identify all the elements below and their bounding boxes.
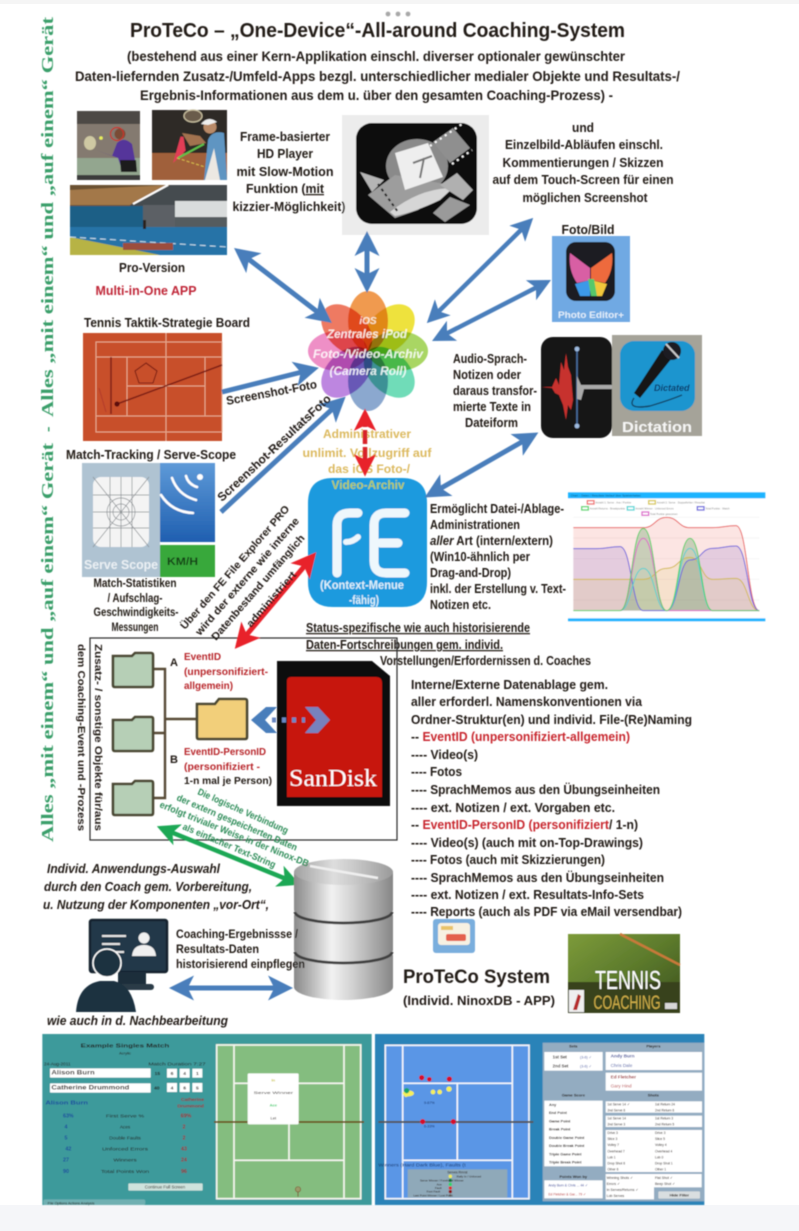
text: status history: Daten-Fortschreibungen gem. individ. (306, 638, 503, 652)
filter panel: 2nd Set (553, 1063, 569, 1068)
text: ProTeCo System: ProTeCo System (403, 967, 550, 988)
text: match statistics: / Aufschlag- (108, 593, 163, 605)
label A: A (170, 657, 178, 669)
icon: database (294, 859, 393, 1000)
arrow: FE to storage (red) (238, 556, 313, 645)
filter panel: Andy Burn (611, 1054, 635, 1059)
filter panel: Double Break Point (549, 1144, 585, 1148)
icon: photo archive flower (308, 291, 428, 411)
icon: dictation (612, 335, 702, 436)
area line chart: Chart – Daten / Resultats-Verlauf über Spieleinheiten (571, 494, 641, 498)
screenshot: match score app: 40 (154, 1085, 160, 1091)
icon: small app (433, 919, 475, 953)
subtitle (75, 49, 680, 103)
area line chart: Total Punkte · Match (705, 507, 730, 511)
filter panel: Lob Serves (607, 1194, 625, 1198)
screenshot: match score app: 4 (171, 1085, 174, 1091)
icon: FE file explorer: -fähig) (349, 595, 379, 607)
text: file administration: Administrationen (430, 518, 520, 532)
screenshot: match score app: 69% (181, 1114, 192, 1120)
filter panel: Lob 0 (655, 1155, 663, 1159)
icon: serve scope (82, 463, 215, 577)
text: data storage list: ---- ext. Notizen / ext. Vorgaben etc. (411, 801, 615, 815)
text: single frame commentary: und (572, 121, 594, 135)
area line chart: Anzahl 1. Serve · Ass / Punkte (595, 501, 632, 505)
tactic board (83, 333, 222, 441)
text: audio notes: Audio-Sprach- (453, 352, 527, 366)
screenshot: match score app: 2 (183, 1125, 186, 1131)
filter panel (543, 1043, 704, 1201)
screenshot: match score app: Serve Winner (254, 1090, 294, 1095)
text: single frame commentary: Einzelbild-Abläufen einschl. (505, 138, 663, 152)
filter panel: 1st Return 3 (655, 1117, 673, 1121)
text: coaching results: Coaching-Ergebnissse / (176, 929, 299, 941)
vertical folder caption: Zusatz- / sonstige Objekte für/aus (92, 644, 104, 831)
image: tennis coaching book: TENNIS (595, 965, 661, 995)
area line chart: Anzahl Returns · Breakpunkte (590, 507, 626, 511)
text: file administration: inkl. der Erstellung v. Text- (430, 582, 566, 596)
area line chart: Anzahl Winner · Unforced Errors (635, 507, 674, 511)
vertical slogan (38, 16, 57, 842)
text: frame based HD player: Frame-basierter (240, 130, 330, 144)
filter panel: Overhead 7 (607, 1149, 625, 1153)
text: administrative access (302, 427, 433, 492)
text: individual selection: u. Nutzung der Komponenten „vor-Ort“, (43, 898, 269, 912)
rotated text: file explorer: Datenbestand umfänglich (209, 532, 307, 643)
text: audio notes: mierte Texte in (453, 400, 531, 414)
arrow: player to archive (238, 251, 328, 320)
screenshot: match score app: 2 (183, 1136, 186, 1142)
text: Ninox app: (Individ. NinoxDB - APP) (403, 993, 555, 1008)
screenshot: match score app: 15 (155, 1071, 160, 1077)
filter panel: (3-6) ✓ (580, 1055, 592, 1059)
rotated green note: Die logische Verbindung (196, 787, 290, 837)
rotated text: file explorer: wird der externe wie interne (192, 515, 302, 639)
text: match tracking heading: Match-Tracking / Serve-Scope (66, 447, 236, 462)
text: status history: Status-spezifische wie auch historisierende (306, 621, 530, 635)
screenshot: match score app: 5 (196, 1085, 199, 1091)
filter panel: Ed Fletcher & Gar... 79 ✓ (548, 1192, 586, 1196)
screenshot: match score app: Aces (120, 1125, 131, 1130)
screenshot: match score app: Alison Burn (51, 1071, 95, 1077)
blue court: Rally In / Unforced (457, 1174, 482, 1178)
text: match statistics: Match-Statistiken (94, 578, 176, 590)
image: tennis coaching book (568, 934, 680, 1014)
filter panel: In Serves/Returns ✓ (607, 1188, 638, 1192)
arrow: audio to FE (429, 435, 534, 495)
filter panel: Drive 3 (607, 1131, 618, 1135)
filter panel: Gary Hind (611, 1084, 632, 1089)
vertical slogan: Alles „mit einem“ und „auf einem“ Gerät (38, 442, 57, 842)
screenshot: match score app: Catherine (181, 1097, 204, 1103)
filter panel: Drive 3 (655, 1131, 666, 1135)
filter panel: Points Won by (560, 1174, 588, 1179)
blue court: Foot Fault (427, 1190, 440, 1194)
text: single frame commentary (492, 121, 674, 205)
arrow: tactic board to archive (222, 369, 314, 392)
filter panel: Triple Break Point (549, 1160, 582, 1164)
icon: photo archive flower: (Camera Roll) (330, 364, 406, 378)
filter panel: Flat Shot ✓ (655, 1176, 673, 1180)
text: status history (306, 621, 591, 668)
text: data storage list: ---- Reports (auch als PDF via eMail versendbar) (411, 905, 682, 919)
screenshot: match score app: 42 (65, 1147, 71, 1153)
area line chart (568, 492, 765, 622)
arrow: archive to FE (red) (363, 413, 367, 472)
filter panel: 1st Return 24 (655, 1102, 675, 1106)
icon: photo editor: Photo Editor+ (558, 310, 624, 321)
blue court: Fault (435, 1186, 442, 1190)
icon: SanDisk card (277, 661, 390, 806)
icon: coach at monitor (76, 920, 167, 1012)
text: event id: (unpersonifiziert- (184, 666, 268, 678)
text: frame based HD player: HD Player (257, 147, 313, 161)
filter panel: Andy Burn & Chris ... 44 ✓ (548, 1183, 588, 1187)
text: single frame commentary: auf dem Touch-Screen für einen (492, 173, 674, 187)
filter panel: Break Point (549, 1128, 571, 1132)
text: data storage list: ---- Video(s) (auch mit on-Top-Drawings) (411, 836, 643, 850)
text: data storage list: aller erforderl. Namenskonventionen via (411, 695, 643, 709)
screenshot: match score app: 4 (183, 1071, 186, 1077)
icon: FE file explorer: (Kontext-Menue (320, 580, 404, 592)
icon: audio waveform (541, 337, 612, 438)
text: single frame commentary: möglichen Screenshot (522, 191, 648, 205)
text: data storage list (411, 678, 692, 919)
text: single frame commentary: Kommentierungen / Skizzen (502, 156, 664, 170)
blue court: 6-33% (424, 1124, 435, 1128)
filter panel: Volley 4 (655, 1143, 667, 1147)
vertical folder caption: dem Coaching-Event und -Prozess (75, 644, 87, 831)
text: tactic board heading: Tennis Taktik-Strategie Board (84, 315, 250, 330)
text: event id: EventID (184, 651, 221, 663)
text: post processing: wie auch in d. Nachbearbeitung (47, 1014, 228, 1028)
icon: serve scope: Serve Scope (84, 558, 158, 572)
screenshot: match score app: 43 (181, 1147, 187, 1153)
text: audio notes: daraus transfor- (453, 384, 537, 398)
blue court: Ace (437, 1182, 442, 1186)
screenshot: match score app: Double Faults (109, 1136, 142, 1141)
icon: dictation: Dictated (654, 383, 690, 393)
text: file administration: (Win10-ähnlich per (430, 550, 530, 564)
screenshot: match score app: Acrylic (119, 1051, 131, 1056)
arrow: folders to database (green) (161, 828, 296, 883)
blue court: Serves Rmrst (447, 1170, 467, 1174)
rotated green note: erfolgt trivialer Weise in der Ninox-DB (158, 800, 310, 870)
text: file administration (430, 502, 566, 612)
blue court: 9-67% (424, 1101, 435, 1105)
icon: dictation: Dictation (622, 420, 692, 436)
screenshot: match score app: 27 (63, 1158, 69, 1164)
filter panel: 2nd Return 5 (655, 1123, 674, 1127)
filter panel: Errors ✓ (607, 1182, 620, 1186)
text: coaching results (176, 929, 305, 971)
photo: indoor tennis hall (70, 185, 227, 255)
blue court (378, 1045, 533, 1199)
filter panel: Slice 5 (655, 1137, 665, 1141)
screenshot: match score app: 5 (65, 1136, 68, 1142)
screenshot: match score app: Drummond (177, 1103, 204, 1109)
text: data storage list: ---- Fotos (411, 765, 462, 779)
screenshot: match score app: 96 (181, 1169, 187, 1175)
label: screenshot foto: Screenshot-Foto (225, 377, 318, 408)
screenshot: match score app: Unforced Errors (102, 1147, 149, 1152)
screenshot: match score app: 24 (181, 1158, 187, 1164)
subtitle: (bestehend aus einer Kern-Applikation einschl. diverser optionaler gewünschter (127, 49, 626, 64)
filter panel: Drop Shot 6 (607, 1162, 625, 1166)
text: administrative access: das iOS Foto-/ (328, 462, 411, 476)
arrow: match tracking to archive (221, 400, 342, 512)
screenshot: match score app: In (272, 1077, 276, 1082)
text: frame based HD player: Funktion (mit (246, 182, 325, 196)
screenshot: match score app: Match Duration 7:27 (148, 1061, 206, 1066)
text: data storage list: ---- SprachMemos aus den Übungseinheiten (411, 782, 660, 797)
filter panel: Double Game Point (549, 1136, 585, 1140)
text: coaching results: Resultats-Daten (176, 944, 259, 956)
text: administrative access: unlimit. Vollzugriff auf (302, 446, 433, 460)
screenshot: match score app: Total Points Won (101, 1169, 150, 1174)
screenshot: match score app: 6 (183, 1085, 186, 1091)
text: coaching results: historisierend einpflegen (176, 959, 305, 971)
filter panel: Game Point (549, 1119, 571, 1123)
text: file administration: Notizen etc. (430, 598, 491, 612)
screenshot: match score app: Continue Full Screen (145, 1185, 186, 1190)
area line chart: Anzahl 2. Serve · Doppelfehler / Resultat (657, 501, 705, 505)
text: frame based HD player: mit Slow-Motion (236, 165, 334, 179)
text: audio notes: Dateiform (465, 416, 518, 430)
top dots (386, 12, 410, 16)
screenshot: match score app: Let (271, 1115, 277, 1120)
text: event person id: (personifiziert - (184, 761, 260, 773)
screenshot: match score app: 24-Aug-2011 (44, 1061, 71, 1066)
text: match statistics: Messungen (112, 622, 158, 634)
icon: photo archive flower: Foto-/Video-Archiv (313, 347, 424, 361)
filter panel: Other 1 (655, 1168, 666, 1172)
icon: film strip (342, 115, 489, 235)
text: data storage list: ---- Video(s) (411, 748, 478, 762)
text: audio notes: Notizen oder (453, 368, 521, 382)
text: match statistics (94, 578, 179, 634)
icon: SanDisk card: SanDisk (289, 766, 377, 792)
screenshot: match score app: Winners (113, 1158, 138, 1163)
label: Foto/Bild: Foto/Bild (562, 223, 614, 237)
text: data storage list: ---- SprachMemos aus den Übungseinheiten (411, 870, 664, 885)
text: file administration: Ermöglicht Datei-/Ablage- (430, 502, 564, 516)
arrow: film to archive (364, 236, 370, 288)
text: match statistics: Geschwindigkeits- (94, 607, 179, 619)
filter panel: 2nd Serve 6 (607, 1108, 625, 1112)
filter panel: Any (549, 1103, 557, 1107)
area line chart: Total Punkte gewonnen (650, 512, 678, 516)
filter panel: Chris Dale (611, 1063, 633, 1068)
blue court: Winners (Hard Dark Blue), Faults (t (378, 1163, 467, 1168)
filter panel: Other 6 (607, 1168, 619, 1172)
filter panel: Beep Shot ✓ (655, 1182, 675, 1186)
filter panel: Game Score (562, 1092, 586, 1097)
filter panel: End Point (549, 1111, 568, 1115)
text: individual selection: durch den Coach gem. Vorbereitung, (44, 880, 252, 894)
photo: tennis player forehand (77, 111, 140, 180)
filter panel: Lob 1 (607, 1155, 616, 1159)
blue court: Last Point Winner / Lost Point (413, 1193, 453, 1197)
filter panel: Hide Filter (670, 1192, 690, 1197)
screenshot: match score app: 90 (63, 1169, 69, 1175)
subtitle: Daten-liefernden Zusatz-/Umfeld-Apps bezgl. unterschiedlicher medialer Objekte und Resultats-/ (75, 69, 680, 84)
photo: tennis player backhand (152, 110, 227, 180)
filter panel: Drop Shot 1 (655, 1162, 673, 1166)
text: individual selection: Individ. Anwendungs-Auswahl (47, 862, 220, 876)
text: administrative access: Administrativer (323, 427, 411, 441)
screenshot: match score app: File Options Actions Analysis (48, 1202, 95, 1206)
label B: B (170, 754, 178, 766)
icon: FE file explorer (308, 478, 427, 607)
text: event id (184, 651, 268, 692)
screenshot: match score app: 4 (65, 1125, 68, 1131)
rotated text: file explorer: administriert (244, 569, 300, 630)
folder tree (113, 653, 247, 815)
screenshot: match score app: Example Singles Match (81, 1043, 169, 1049)
text: event person id: EventID-PersonID (184, 746, 266, 758)
text: individual selection (43, 862, 269, 912)
filter panel: 2nd Serve 3 (607, 1123, 625, 1127)
text: file administration: Drag-and-Drop) (430, 566, 511, 580)
icon: photo archive flower: iOS (359, 316, 377, 327)
filter panel: Overhead 4 (655, 1149, 673, 1153)
rotated green note: der extern gespeicherten Daten (175, 793, 299, 854)
text: data storage list: Ordner-Struktur(en) und individ. File-(Re)Naming (411, 713, 692, 727)
text: frame based HD player (232, 130, 346, 214)
screenshot: match score app: 6 (171, 1071, 174, 1077)
image: tennis coaching book: COACHING (594, 993, 660, 1014)
screenshot: serve analysis app (375, 1034, 704, 1205)
panel: folder structure frame (75, 638, 397, 840)
text: Multi-in-One APP: Multi-in-One APP (96, 283, 197, 298)
double arrow: card to folder (251, 707, 330, 733)
filter panel: Slice 3 (607, 1137, 617, 1141)
icon: serve scope: KM/H (167, 556, 198, 568)
text: event person id (184, 746, 272, 787)
filter panel: Winning Shots ✓ (607, 1176, 633, 1180)
text: event person id: 1-n mal je Person) (184, 775, 272, 787)
vertical folder caption (75, 644, 104, 831)
filter panel: 1st Serve 14 (607, 1117, 626, 1121)
text: file administration: aller Art (intern/extern) (430, 534, 553, 548)
filter panel: Triple Game Point (549, 1152, 582, 1156)
filter panel: Volley 7 (607, 1143, 619, 1147)
text: data storage list: Interne/Externe Datenablage gem. (411, 678, 608, 692)
text: status history: Vorstellungen/Erfordernissen d. Coaches (380, 654, 591, 668)
arrow: coach to database (174, 986, 288, 990)
label: screenshot result foto: Screenshot-ResultatsFoto (214, 392, 334, 504)
filter panel: Ed Fletcher (611, 1075, 636, 1080)
text: Pro-Version: Pro-Version (119, 260, 185, 275)
screenshot: match score app: Alison Burn (45, 1100, 88, 1106)
vertical slogan: Alles „mit einem“ und „auf einem“ Gerät (38, 16, 57, 417)
screenshot: match score app (42, 1034, 372, 1206)
filter panel: Sets (569, 1043, 578, 1048)
arrow: photo editor to archive (436, 282, 547, 339)
icon: photo archive flower: Zentrales iPod (326, 327, 408, 341)
text: event id: allgemein) (184, 680, 233, 692)
subtitle: Ergebnis-Informationen aus dem u. über den gesamten Coaching-Prozess) - (140, 88, 613, 103)
filter panel: Players (646, 1043, 661, 1048)
filter panel: (3-6) ✓ (580, 1064, 592, 1068)
screenshot: match score app: Catherine Drummond (51, 1085, 130, 1091)
screenshot: match score app: Ace (270, 1103, 278, 1108)
screenshot: match score app: 1 (196, 1071, 199, 1077)
screenshot: match score app: 63% (63, 1114, 74, 1120)
text: data storage list: -- EventID (unpersonifiziert-allgemein) (411, 730, 630, 744)
text: data storage list: ---- ext. Notizen / ext. Resultats-Info-Sets (411, 888, 644, 902)
vertical slogan: - (38, 426, 57, 432)
rotated green note: als einfacher Text-String (181, 822, 277, 871)
filter panel: 2nd Return 6 (655, 1108, 674, 1112)
screenshot: match score app: First Serve % (106, 1114, 144, 1119)
title: ProTeCo – „One-Device“-All-around Coaching-System (130, 20, 625, 42)
icon: photo editor (552, 236, 630, 322)
text: data storage list: -- EventID-PersonID (personifiziert/ 1-n) (411, 818, 638, 832)
text: administrative access: Video-Archiv (332, 478, 405, 492)
blue court: Serve Winner / Forehand Winner (420, 1178, 464, 1182)
filter panel: 1st Set (553, 1054, 567, 1059)
text: audio notes (453, 352, 537, 430)
text: frame based HD player: kizzier-Möglichkeit) (232, 200, 346, 214)
filter panel: Shots (648, 1092, 660, 1097)
filter panel: 1st Serve 14 ✓ (607, 1102, 630, 1106)
arrow: comments to archive (430, 221, 530, 320)
text: data storage list: ---- Fotos (auch mit Skizzierungen) (411, 853, 605, 867)
rotated text: file explorer: Über den FE File Explorer PRO (177, 503, 292, 632)
